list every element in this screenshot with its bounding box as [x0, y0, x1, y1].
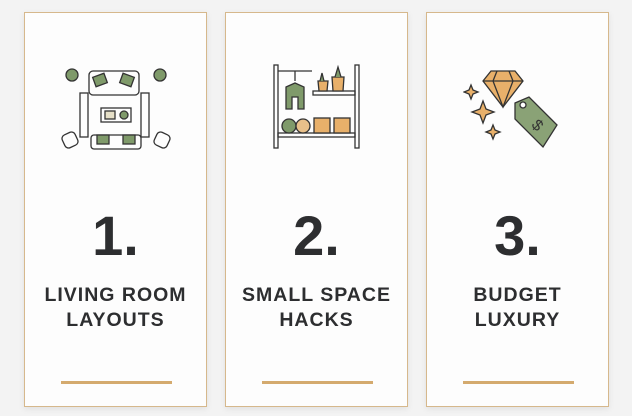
title: small space hacks: SMALL SPACE	[242, 284, 391, 306]
title: living room layouts	[44, 284, 187, 331]
underline accent	[61, 381, 172, 384]
title: budget luxury: BUDGET	[473, 284, 562, 306]
card 2: small space hacks	[225, 12, 408, 407]
card 1: living room layouts	[24, 12, 207, 407]
title: living room layouts: LIVING ROOM	[44, 284, 187, 306]
title: living room layouts: LAYOUTS	[66, 309, 165, 331]
title: budget luxury: LUXURY	[475, 309, 560, 331]
underline accent	[262, 381, 373, 384]
title: small space hacks	[242, 284, 391, 331]
card 3: budget luxury	[426, 12, 609, 407]
title: small space hacks: HACKS	[279, 309, 354, 331]
underline accent	[463, 381, 574, 384]
icon: living room floor plan	[61, 68, 171, 150]
icon: diamond and price tag: $	[528, 117, 546, 135]
title: budget luxury	[473, 284, 562, 331]
number 2: 2.	[293, 204, 340, 267]
number 1: 1.	[92, 204, 139, 267]
icon: diamond and price tag	[463, 70, 558, 148]
icon: shelf with hanger and plants	[273, 64, 360, 149]
number 3: 3.	[494, 204, 541, 267]
